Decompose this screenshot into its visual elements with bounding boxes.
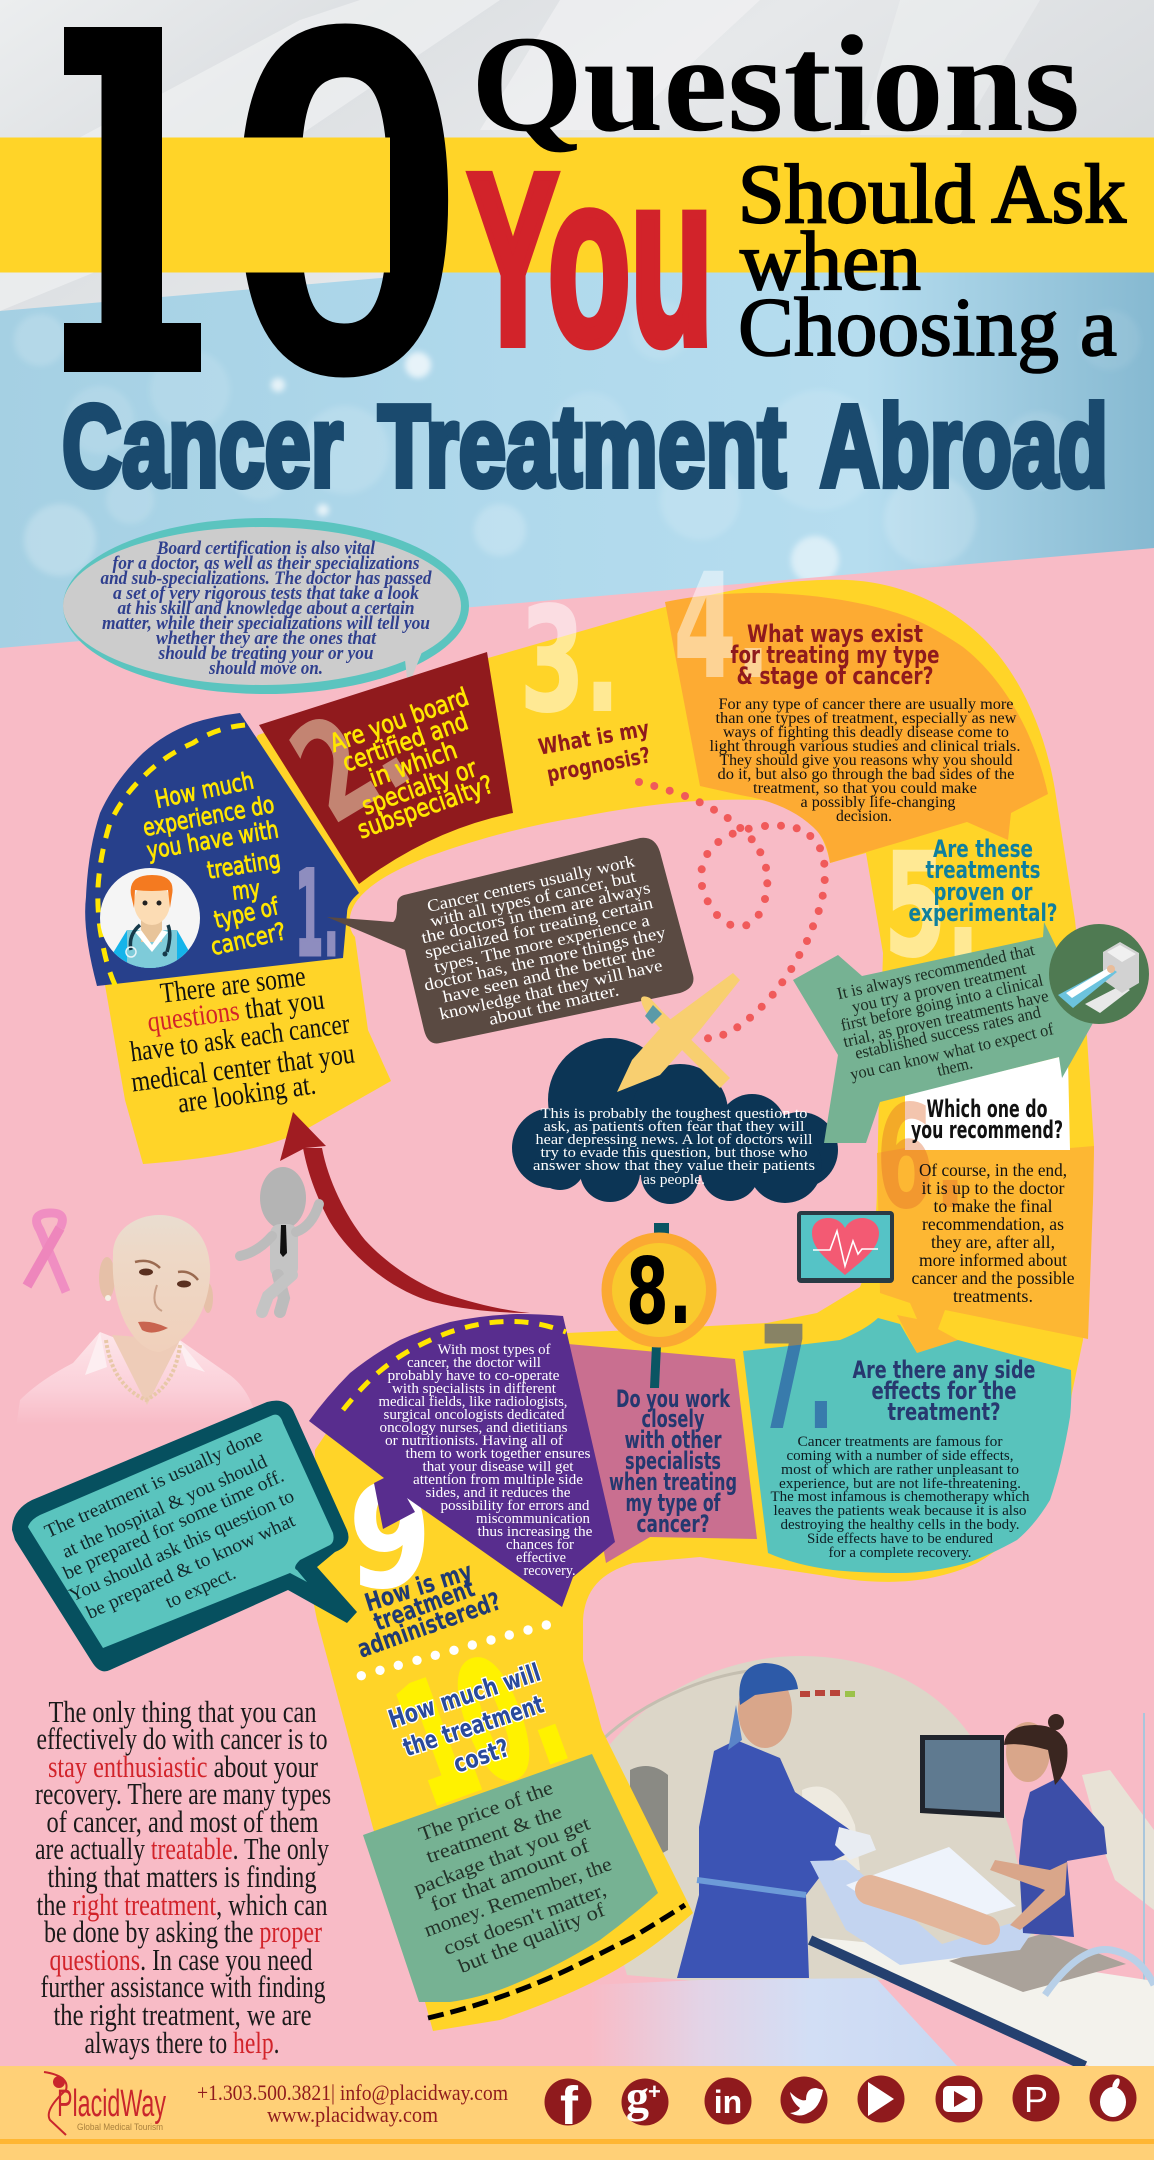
text block: intro questions: questions that you: [145, 984, 326, 1039]
panel: question 4 orange blob: For any type of cancer there are usually more: [718, 696, 1014, 713]
text block: closing message: be done by asking the proper: [44, 1914, 323, 1949]
title: You: You: [468, 124, 713, 395]
text block: closing message: stay enthusiastic about your: [48, 1749, 319, 1784]
text block: intro questions: There are some: [158, 960, 307, 1010]
badge: number 8: [602, 1223, 716, 1388]
panel: purple blade: miscommunication: [476, 1511, 591, 1527]
panel: question 2 board certified: specialty or: [358, 753, 481, 821]
panel: question 7 side effects: most of which are rather unpleasant to: [781, 1462, 1019, 1478]
panel: question 10 cost: money. Remember, the: [421, 1853, 615, 1942]
heading: how is my treatment administered: administered?: [354, 1586, 505, 1664]
speech bubble: teal treatment: You should ask this question to: [66, 1486, 298, 1606]
panel: question 10 cost: the treatment: [399, 1690, 547, 1762]
illustration: grey figure: [240, 1167, 319, 1312]
panel: question 3 prognosis: prognosis?: [545, 743, 653, 788]
speech bubble: board certification: whether they are the ones that: [156, 628, 377, 649]
logo: PlacidWay: PlacidWay: [57, 2083, 166, 2125]
text block: cloud: ask, as patients often fear that they will: [544, 1119, 804, 1135]
panel: question 7 side effects: effects for the: [872, 1377, 1016, 1405]
panel: question 6 recommend: Which one do: [926, 1095, 1048, 1123]
panel: question 4 orange blob: do it, but also go through the bad sides of the: [718, 766, 1015, 783]
panel: brown speech bubble: about the matter.: [487, 980, 621, 1029]
panel: question 4 orange blob: ways of fighting this deadly disease come to: [723, 724, 1009, 741]
panel: question 8 specialists: Do you work: [616, 1385, 731, 1413]
text block: closing message: effectively do with cancer is to: [36, 1721, 328, 1756]
panel: question 7 side effects: for a complete recovery.: [828, 1545, 972, 1561]
text block: closing message: questions. In case you need: [50, 1942, 313, 1977]
panel: question 7 side effects: Side effects have to be endured: [807, 1531, 993, 1547]
panel: question 1 experience: type of: [211, 892, 281, 934]
panel: green arrow: you try a proven treatment: [850, 959, 1028, 1017]
text block: closing message: recovery. There are many types: [35, 1776, 331, 1811]
panel: purple blade: chances for: [506, 1537, 574, 1553]
panel: purple blade: cancer, the doctor will: [407, 1355, 541, 1371]
panel: question 8 specialists: closely: [642, 1405, 705, 1433]
panel: question 6 recommend: you recommend?: [911, 1116, 1063, 1144]
panel: green arrow: first before going into a clinical: [839, 970, 1045, 1035]
icon: airplane: [617, 973, 740, 1092]
panel: green arrow: them.: [935, 1053, 974, 1080]
panel: question 7 side effects: experience, but are not life-threatening.: [779, 1476, 1021, 1492]
panel: question 3 prognosis: [520, 576, 653, 788]
panel: question 8 specialists: [568, 1344, 757, 1563]
panel: question 2 board certified: subspecialty?: [353, 770, 497, 844]
panel: question 6 recommend: it is up to the doctor: [922, 1178, 1065, 1198]
panel: question 7 side effects: destroying the healthy cells in the body.: [780, 1517, 1020, 1533]
speech bubble: teal treatment: be prepared & to know what: [83, 1510, 299, 1624]
panel: question 6 recommend: more informed about: [919, 1250, 1067, 1270]
contact details: [197, 2080, 508, 2127]
panel: question 6 recommend: [876, 1057, 1094, 1353]
panel: question 10 cost: 10.: [377, 1612, 587, 1843]
panel: question 1 experience: you have with: [145, 815, 281, 865]
text block: cloud: try to evade this question, but those who: [540, 1145, 808, 1161]
panel: purple blade: with specialists in different: [392, 1381, 556, 1397]
panel: question 8 specialists: specialists: [625, 1447, 721, 1475]
text block: closing message: of cancer, and most of them: [46, 1804, 318, 1839]
panel: brown speech bubble: have seen and the better the: [441, 941, 657, 1006]
panel: question 7 side effects: [743, 1295, 1071, 1573]
panel: question 4 orange blob: than one types of treatment, especially as new: [716, 710, 1017, 727]
contact details: +1.303.500.3821| info@placidway.com: [197, 2080, 508, 2105]
badge: number 8: 8.: [626, 1238, 692, 1345]
panel: question 5 treatments: Are these: [933, 835, 1033, 863]
panel: purple blade: or nutritionists. Having all of: [385, 1433, 563, 1449]
text block: closing message: further assistance with finding: [40, 1969, 326, 2004]
photo: patient portrait: [15, 1215, 258, 1435]
panel: brown speech bubble: types. The more experience a: [432, 910, 652, 977]
yellow title band: [0, 138, 1154, 272]
social icons: g: [626, 2071, 649, 2122]
social icons: in: [714, 2084, 742, 2120]
text block: cloud: hear depressing news. A lot of doctors will: [536, 1132, 812, 1148]
panel: green arrow: established success rates and: [853, 1002, 1043, 1063]
text block: closing message: the right treatment, we are: [54, 1997, 312, 2032]
panel: question 6 recommend: to make the final: [934, 1196, 1053, 1216]
title: Choosing a: Choosing a: [738, 281, 1117, 374]
panel: question 7 side effects: The most infamous is chemotherapy which: [770, 1489, 1030, 1505]
panel: question 7 side effects: leaves the patients weak because it is also: [774, 1503, 1026, 1519]
title: Cancer Treatment Abroad: Treatment: [378, 381, 786, 511]
text block: closing message: [35, 1694, 331, 2060]
panel: question 7 side effects: Cancer treatments are famous for: [798, 1434, 1002, 1450]
panel: brown speech bubble: [327, 838, 693, 1043]
panel: question 2 board certified: certified and: [339, 706, 472, 778]
text block: intro questions: [128, 960, 356, 1120]
panel: question 4 orange blob: [665, 543, 1048, 863]
panel: question 4 orange blob: & stage of cancer?: [736, 662, 934, 690]
panel: purple blade: probably have to co-operate: [388, 1368, 560, 1384]
text block: closing message: are actually treatable. The only: [35, 1831, 329, 1866]
panel: purple blade: sides, and it reduces the: [426, 1485, 570, 1501]
panel: purple blade: attention from multiple side: [413, 1472, 583, 1488]
logo: PlacidWay: Global Medical Tourism: [77, 2122, 163, 2132]
text block: cloud: [533, 1106, 815, 1188]
social icons: P: [1024, 2079, 1048, 2120]
panel: question 4 orange blob: 4.: [674, 543, 770, 710]
panel: brown speech bubble: Cancer centers usually work: [425, 851, 637, 916]
speech bubble: board certification: should be treating your or you: [158, 643, 374, 664]
panel: question 2 board certified: [259, 652, 513, 884]
panel: purple blade: that your disease will get: [422, 1459, 574, 1475]
panel: purple blade: surgical oncologists dedicated: [384, 1407, 565, 1423]
panel: brown speech bubble: the doctors in them are always: [420, 878, 652, 947]
panel: question 10 cost: cost doesn't matter,: [440, 1879, 609, 1960]
panel: question 4 orange blob: treatment, so that you could make: [753, 780, 977, 797]
panel: brown speech bubble: specialized for treating certain: [423, 893, 655, 962]
panel: question 8 specialists: my type of: [626, 1489, 721, 1517]
header background photo: [0, 0, 1154, 660]
title: when: when: [740, 215, 921, 308]
panel: question 8 specialists: cancer?: [636, 1510, 710, 1538]
panel: purple blade: recovery.: [524, 1563, 576, 1579]
panel: question 6 recommend: treatments.: [953, 1286, 1033, 1306]
panel: purple blade: With most types of: [438, 1342, 551, 1358]
panel: green arrow: you can know what to expect of: [848, 1019, 1056, 1084]
text block: cloud: answer show that they value their patients: [533, 1158, 815, 1174]
panel: question 4 orange blob: light through various studies and clinical trials.: [710, 738, 1020, 755]
panel: purple blade: medical fields, like radiologists,: [378, 1394, 568, 1410]
panel: question 5 treatments: proven or: [934, 878, 1033, 906]
panel: question 6 recommend: cancer and the possible: [912, 1268, 1075, 1288]
speech bubble: board certification: a set of very rigorous tests that take a look: [113, 583, 419, 604]
text block: cloud: as people.: [643, 1172, 705, 1188]
panel: question 1 experience: my: [230, 874, 262, 906]
panel: question 7 side effects: Are there any side: [852, 1356, 1036, 1384]
panel: question 5 treatments: experimental?: [908, 899, 1058, 927]
panel: question 8 specialists: with other: [624, 1426, 722, 1454]
panel: question 4 orange blob: decision.: [836, 808, 892, 825]
icon: MRI scanner: [1049, 924, 1149, 1024]
panel: brown speech bubble: knowledge that they will have: [437, 956, 664, 1024]
text block: closing message: always there to help.: [84, 2025, 279, 2060]
speech bubble: teal treatment: [12, 1401, 357, 1671]
footer band: [0, 2066, 1154, 2160]
social icons: +: [648, 2079, 661, 2104]
arrow: dark red curved: [280, 1112, 530, 1313]
text block: intro questions: have to ask each cancer: [128, 1008, 352, 1068]
dotted flight path: [635, 778, 829, 1042]
panel: green arrow: It is always recommended that: [835, 940, 1037, 1003]
text block: intro questions: medical center that you: [129, 1038, 356, 1099]
speech bubble: teal treatment: be prepared for some time off.: [60, 1466, 287, 1584]
panel: purple blade: [309, 1314, 615, 1607]
panel: question 5 treatments: treatments: [926, 856, 1040, 884]
text block: closing message: The only thing that you can: [48, 1694, 317, 1729]
panel: question 1 experience: cancer?: [208, 917, 288, 961]
panel: question 6 recommend: Of course, in the end,: [919, 1160, 1067, 1180]
speech bubble: teal treatment: at the hospital & you should: [59, 1451, 271, 1563]
panel: question 4 orange blob: They should give you reasons why you should: [720, 752, 1013, 769]
logo: PlacidWay: [44, 2072, 166, 2135]
panel: purple blade: thus increasing the: [478, 1524, 592, 1540]
heading: how is my treatment administered: How is my: [361, 1556, 476, 1617]
panel: question 3 prognosis: What is my: [537, 717, 651, 761]
speech bubble: board certification: [63, 518, 469, 694]
heading: how is my treatment administered: [354, 1556, 505, 1664]
panel: question 10 cost: package that you get: [411, 1812, 594, 1900]
panel: purple blade: them to work together ensures: [406, 1446, 591, 1462]
panel: question 2 board certified: Are you board: [326, 682, 472, 758]
panel: question 1 experience: [85, 713, 359, 986]
panel: green arrow: [793, 922, 1093, 1143]
panel: question 10 cost: [363, 1612, 685, 2018]
panel: question 6 recommend: 6.: [876, 1074, 966, 1241]
social icons: [544, 2071, 1136, 2136]
panel: brown speech bubble: with all types of cancer, but: [428, 867, 638, 931]
title: Cancer Treatment Abroad: Cancer: [62, 381, 343, 511]
speech bubble: board certification: for a doctor, as well as their specializations: [112, 553, 420, 574]
icon: heart monitor: [797, 1211, 894, 1283]
speech bubble: board certification: and sub-specializations. The doctor has passed: [100, 568, 432, 589]
title: Questions: Questions: [471, 7, 1080, 160]
panel: question 4 orange blob: for treating my type: [730, 641, 940, 669]
text block: intro questions: are looking at.: [176, 1069, 318, 1120]
panel: question 10 cost: but the quality of: [455, 1899, 609, 1978]
panel: dark blue cloud: [512, 1038, 838, 1204]
panel: question 2 board certified: in which: [365, 735, 461, 793]
panel: question 6 recommend: they are, after all,: [931, 1232, 1055, 1252]
title: Should Ask: Should Ask: [738, 148, 1126, 241]
panel: question 4 orange blob: a possibly life-changing: [800, 794, 956, 811]
pink background panel: [0, 548, 1154, 2160]
white dotted divider: [357, 1620, 551, 1680]
text block: closing message: the right treatment, which can: [36, 1887, 328, 1922]
panel: question 5 treatments: 5.: [884, 822, 980, 989]
winding yellow road: [105, 580, 1094, 2031]
panel: purple blade: effective: [516, 1550, 566, 1566]
panel: question 10 cost: treatment & the: [423, 1801, 565, 1868]
heading: how is my treatment administered: treatment: [370, 1573, 478, 1637]
panel: purple blade: possibility for errors and: [440, 1498, 590, 1514]
speech bubble: board certification: at his skill and knowledge about a certain: [118, 598, 414, 619]
icon: doctor avatar: [100, 868, 200, 970]
panel: question 7 side effects: coming with a number of side effects,: [786, 1448, 1014, 1464]
panel: question 10 cost: for that amount of: [427, 1835, 593, 1916]
panel: question 9 number: 9: [348, 1454, 432, 1621]
panel: question 4 orange blob: What ways exist: [747, 620, 923, 648]
panel: question 7 side effects: 7.: [760, 1295, 834, 1462]
speech bubble: board certification: matter, while their specializations will tell you: [102, 613, 430, 634]
photo: CT scanner with doctor and nurse: [575, 1656, 1154, 2066]
panel: purple blade: oncology nurses, and dietitians: [380, 1420, 568, 1436]
panel: question 2 board certified: 2.: [267, 666, 435, 854]
panel: question 10 cost: cost?: [450, 1733, 513, 1779]
panel: question 1 experience: experience do: [141, 790, 276, 842]
panel: question 1 experience: How much: [153, 766, 256, 814]
panel: question 6 recommend: recommendation, as: [922, 1214, 1064, 1234]
panel: question 7 side effects: treatment?: [888, 1398, 1000, 1426]
panel: question 3 prognosis: 3.: [520, 576, 620, 744]
title: big number 10: [64, 24, 448, 378]
panel: question 8 specialists: when treating: [609, 1468, 737, 1496]
panel: green arrow: trial, as proven treatments have: [841, 986, 1050, 1051]
panel: question 10 cost: How much will: [385, 1658, 544, 1734]
panel: brown speech bubble: doctor has, the more things they: [422, 923, 668, 995]
speech bubble: board certification: should move on.: [208, 658, 323, 679]
title: Cancer Treatment Abroad: [62, 381, 1108, 511]
speech bubble: board certification: Board certification is also vital: [156, 538, 376, 559]
speech bubble: teal treatment: to expect.: [162, 1563, 239, 1613]
panel: question 10 cost: The price of the: [416, 1777, 556, 1846]
contact details: www.placidway.com: [267, 2102, 438, 2127]
icon: pink ribbon: [27, 1213, 66, 1292]
social icons: f: [560, 2076, 579, 2136]
text block: closing message: thing that matters is finding: [48, 1859, 316, 1894]
panel: question 1 experience: treating: [205, 845, 282, 885]
text: 1.: [295, 846, 339, 984]
text block: cloud: This is probably the toughest question to: [540, 1106, 808, 1122]
footer stripe: [0, 2139, 1154, 2144]
speech bubble: teal treatment: The treatment is usually done: [42, 1425, 266, 1543]
